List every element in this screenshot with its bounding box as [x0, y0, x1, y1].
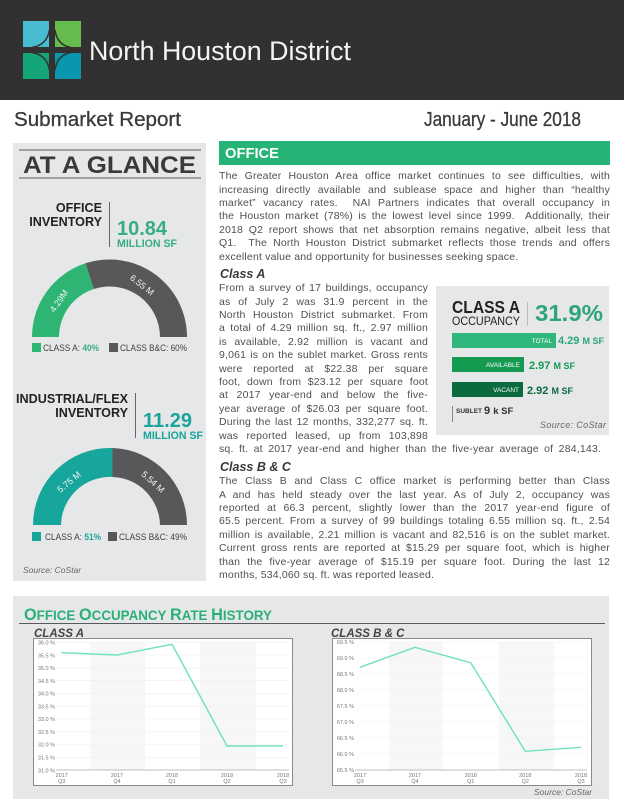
line chart: class a: Q3: [58, 779, 65, 785]
intro paragraph: the Houston market (78%) is the lowest level since 1999. Additionally, their: [219, 210, 610, 222]
office inventory value: MILLION SF: [117, 238, 177, 250]
chart label: class b and c: CLASS B & C: [331, 628, 405, 640]
intro paragraph: increasing directly available and sublease space and higher than “healthy: [219, 184, 610, 196]
line chart: class a: 33.5 %: [38, 704, 55, 710]
industrial gauge chart: 5.75 M: [55, 469, 83, 495]
class b and c paragraph: [219, 475, 610, 581]
occupancy title: OCCUPANCY: [452, 314, 520, 328]
line chart: class a: 34.0 %: [38, 692, 55, 698]
bar: sublet: SUBLET: [456, 408, 482, 415]
line chart: class a: Q2: [223, 779, 231, 785]
line chart: class a: 2018: [166, 773, 178, 779]
bar: sublet: [452, 405, 513, 422]
industrial gauge chart: [33, 448, 187, 525]
line chart: class b and c: Q1: [467, 779, 474, 785]
class b and c paragraph: Current gross rents are reported at $15.29 per square foot, which is higher: [219, 542, 610, 554]
class a paragraph: [219, 282, 601, 455]
bar: available: AVAILABLE: [486, 362, 521, 369]
class a paragraph: at 2017 year-end and below the five-: [219, 389, 428, 401]
line chart: class a: 36.0 %: [38, 640, 55, 646]
line chart: class b and c: 2018: [575, 773, 587, 779]
intro paragraph: 2018 Q2 report shows that net absorption remains negative, albeit less that: [219, 224, 610, 236]
occupancy value: 31.9%: [535, 300, 603, 326]
industrial inventory label: INDUSTRIAL/FLEX: [16, 392, 129, 406]
line chart: class b and c: Q4: [411, 779, 419, 785]
class a paragraph: were reported at $22.38 per square: [219, 363, 428, 375]
line chart: class b and c: [332, 638, 592, 786]
class a paragraph: 9,061 is on the sublet market. Gross rents: [219, 349, 428, 361]
industrial inventory value: 11.29: [143, 410, 192, 432]
class a paragraph: During the last 12 months, 332,277 sq. ft.: [219, 416, 428, 428]
line chart: class b and c: 65.5 %: [337, 768, 354, 774]
office legend: CLASS A: 40%: [43, 343, 99, 353]
line chart: class b and c: Q2: [522, 779, 529, 785]
line chart: class a: Q3: [279, 779, 287, 785]
line chart: class b and c: 66.5 %: [337, 736, 354, 742]
office section heading: [219, 141, 610, 165]
class a paragraph: is available, 2.92 million is vacant and: [219, 336, 428, 348]
class a paragraph: sq. ft. at 2017 year-end and higher than the five-year average of 284,143.: [219, 443, 601, 455]
class b and c paragraph: The Class B and Class C office market is performing better than Class: [219, 475, 610, 487]
line chart: class b and c: 67.5 %: [337, 704, 354, 710]
line chart: class b and c: 2018: [519, 773, 531, 779]
line chart: class a: 2018: [221, 773, 233, 779]
line chart: class b and c: Q3: [356, 779, 364, 785]
chart label: class a: CLASS A: [34, 628, 84, 640]
line chart: class a: 34.5 %: [38, 679, 55, 685]
office inventory value: 10.84: [117, 218, 168, 240]
line chart: class a: 33.0 %: [38, 717, 55, 723]
office inventory label: OFFICE: [56, 201, 102, 215]
line chart: class a: 35.0 %: [38, 666, 55, 672]
line chart: class b and c: 2017: [409, 773, 421, 779]
industrial inventory label: INVENTORY: [55, 406, 129, 420]
line chart: class a: Q4: [113, 779, 121, 785]
office gauge chart: [32, 259, 187, 337]
bar: sublet: 9 k SF: [484, 405, 513, 417]
line chart: class b and c: 69.5 %: [337, 640, 354, 646]
panel: at a glance: [13, 143, 206, 581]
intro paragraph: [219, 170, 610, 263]
industrial legend: [32, 532, 187, 542]
line chart: class b and c: Q3: [577, 779, 585, 785]
bar: vacant: [452, 382, 573, 397]
line chart: class a: Q1: [168, 779, 176, 785]
line chart: class b and c: 2018: [465, 773, 477, 779]
intro paragraph: The Greater Houston Area office market continues to see difficulties, with: [219, 170, 610, 182]
class b and c paragraph: A and has held steady over the last year. As of July 2, occupancy was: [219, 489, 610, 501]
class a paragraph: From a survey of 17 buildings, occupancy: [219, 282, 428, 294]
industrial legend: CLASS A: 51%: [45, 532, 101, 542]
class b and c paragraph: months, 534,060 sq. ft. was reported leased.: [219, 569, 434, 581]
intro paragraph: excellent value and opportunity for businesses seeking space.: [219, 251, 518, 263]
class a paragraph: a total of 4.29 million sq. ft., 2.97 million: [219, 322, 428, 334]
industrial gauge chart: 5.54 M: [139, 469, 167, 495]
office gauge chart: 6.55 M: [128, 273, 156, 297]
office legend: [32, 343, 187, 353]
line chart: class a: [34, 638, 292, 786]
line chart: class a: 32.5 %: [38, 730, 55, 736]
line chart: class b and c: 68.0 %: [337, 688, 354, 694]
bar: vacant: VACANT: [493, 387, 519, 394]
office inventory value: [117, 218, 177, 250]
class b and c paragraph: reported at 66.3 percent, slightly lower than the 2017 year-end figure of: [219, 502, 610, 514]
line chart: class b and c: 66.0 %: [337, 752, 354, 758]
office gauge chart: 4.29M: [48, 288, 70, 314]
bar: total: TOTAL: [532, 338, 552, 345]
intro paragraph: market” vacancy rates. NAI Partners indicates that overall occupancy in: [219, 197, 610, 209]
industrial inventory value: MILLION SF: [143, 430, 203, 442]
line chart: class a: 35.5 %: [38, 653, 55, 659]
office legend: CLASS B&C: 60%: [120, 343, 187, 353]
bar: available: 2.97 M SF: [529, 360, 575, 372]
logo icon: [23, 21, 81, 79]
line chart: class b and c: 69.0 %: [337, 656, 354, 662]
source note: Source: CoStar: [23, 565, 82, 575]
bar: available: [452, 357, 575, 372]
line chart: class a: 31.5 %: [38, 756, 55, 762]
class b and c paragraph: million is available, 2.21 million is vacant and 82,516 is on the sublet market.: [219, 529, 610, 541]
intro paragraph: Q1. The North Houston District submarket reflects those trends and offers: [219, 237, 610, 249]
industrial inventory value: [143, 410, 203, 442]
class b and c heading: Class B & C: [220, 460, 291, 474]
panel: occupancy rate history: [13, 596, 609, 799]
chart source: Source: CoStar: [534, 787, 593, 797]
line chart: class a: 31.0 %: [38, 768, 55, 774]
class a paragraph: was reported leased, up from 103,898: [219, 430, 428, 442]
class a paragraph: foot, down from $23.12 per square foot: [219, 376, 428, 388]
line chart: class a: 2017: [56, 773, 68, 779]
line chart: class b and c: 2017: [354, 773, 366, 779]
panel: class a occupancy: [436, 286, 609, 435]
office inventory label: INVENTORY: [29, 215, 103, 229]
at a glance heading: AT A GLANCE: [23, 152, 196, 179]
bar: total: 4.29 M SF: [558, 335, 604, 347]
class a paragraph: as of July 2 was 31.9 percent in the: [219, 296, 428, 308]
history heading: OFFICE OCCUPANCY RATE HISTORY: [24, 605, 273, 624]
line chart: class b and c: 68.5 %: [337, 672, 354, 678]
line chart: class a: 32.0 %: [38, 743, 55, 749]
bar: total: [452, 333, 604, 348]
occupancy title: [452, 297, 520, 328]
line chart: class b and c: 67.0 %: [337, 720, 354, 726]
report title: Submarket Report: [14, 109, 181, 131]
class a heading: Class A: [220, 267, 265, 281]
occupancy source: Source: CoStar: [540, 420, 607, 430]
bar: vacant: 2.92 M SF: [527, 385, 573, 397]
class b and c paragraph: 65.5 percent. From a survey of 99 buildings totaling 6.55 million sq. ft., 2.54: [219, 515, 610, 527]
class a paragraph: North Houston District submarket. From: [219, 309, 428, 321]
class a paragraph: year average of $26.03 per square foot.: [219, 403, 428, 415]
header banner: [0, 0, 624, 100]
logo wordmark: North Houston District: [89, 36, 351, 66]
class b and c paragraph: than the five-year average of $15.19 per square foot. During the last 12: [219, 556, 610, 568]
office section heading: OFFICE: [225, 145, 279, 162]
report date: January - June 2018: [424, 109, 581, 131]
occupancy title: CLASS A: [452, 297, 520, 317]
industrial legend: CLASS B&C: 49%: [119, 532, 187, 542]
line chart: class a: 2017: [111, 773, 123, 779]
line chart: class a: 2018: [277, 773, 289, 779]
